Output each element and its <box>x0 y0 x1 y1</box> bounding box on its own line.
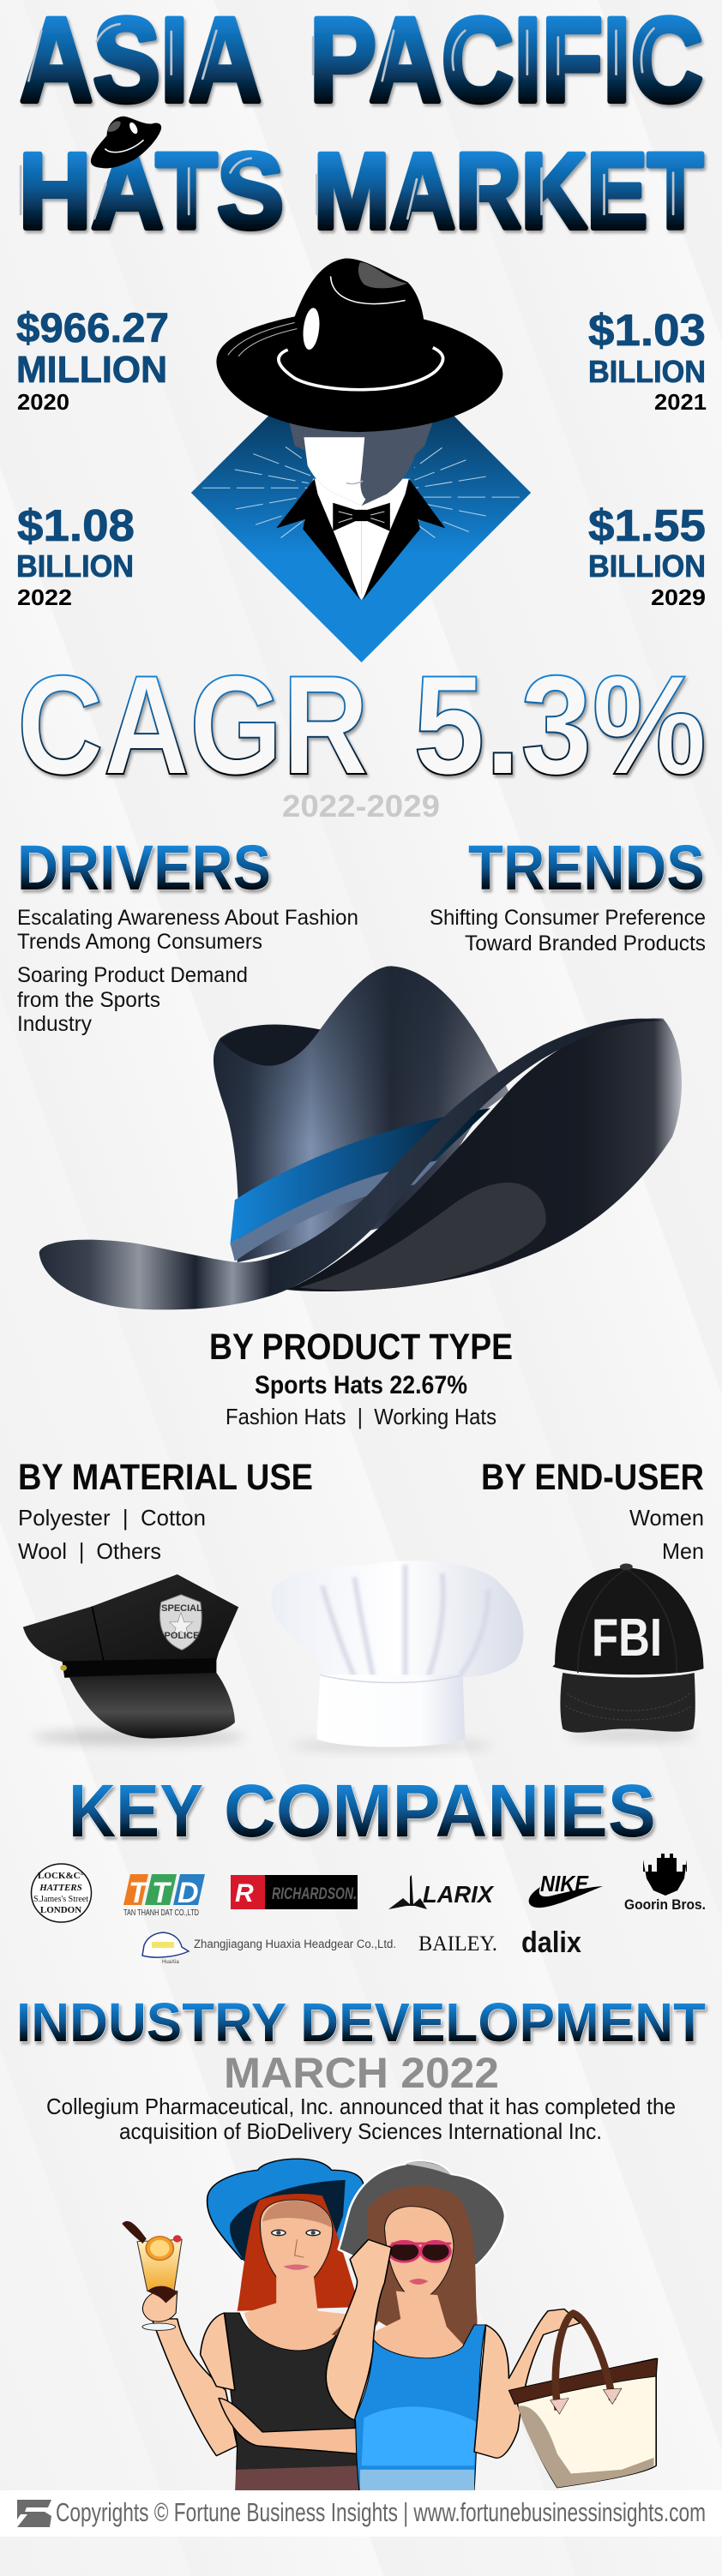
shirt <box>304 479 419 600</box>
bag arm <box>474 2309 581 2458</box>
title <box>19 0 703 251</box>
badge text <box>161 1603 202 1641</box>
logo: Huaxia <box>142 1932 396 1965</box>
rays <box>202 446 520 538</box>
logo: TTD <box>123 1874 205 1918</box>
product types: Fashion Hats | Working Hats <box>226 1404 496 1429</box>
logo: Goorin Bros <box>624 1854 706 1913</box>
icon: FBI cap <box>552 1564 704 1740</box>
stat: 2020 <box>16 306 169 415</box>
logo: Lock & Co: HATTERS <box>39 1883 82 1893</box>
cocktail <box>122 2221 182 2330</box>
logo: Bailey: BAILEY. <box>418 1932 497 1956</box>
heading: by material use: BY MATERIAL USE <box>18 1457 313 1498</box>
logo: Huaxia: Zhangjiagang Huaxia Headgear Co.,Ltd. <box>194 1938 396 1950</box>
development text: Collegium Pharmaceutical, Inc. announced that it has completed the <box>46 2094 676 2119</box>
stat: 2022 <box>16 501 135 610</box>
logo: Lock & Co: S.James's Street <box>33 1894 88 1904</box>
logo: Nike <box>529 1871 603 1908</box>
title line 2 <box>19 132 703 251</box>
stat: 2021 <box>588 306 707 415</box>
logo: Lock & Co <box>31 1864 91 1922</box>
material list <box>18 1505 206 1564</box>
end-user list: Women <box>629 1505 704 1531</box>
icon: small hat on title <box>91 117 161 168</box>
woman face <box>384 2207 454 2301</box>
crown <box>214 966 508 1262</box>
CAGR: CAGR <box>17 646 369 804</box>
stat: 2021: 2021 <box>654 389 707 415</box>
stat: 2020: 2020 <box>17 389 69 415</box>
material list: Polyester | Cotton <box>18 1505 206 1531</box>
black top <box>225 2313 359 2490</box>
sports hats share: Sports Hats 22.67% <box>255 1371 467 1399</box>
logo: Richardson <box>231 1875 358 1909</box>
drivers text: from the Sports <box>17 988 160 1012</box>
crossed forearm <box>219 2399 359 2453</box>
material list: Wool | Others <box>18 1538 161 1564</box>
logo: TTD: T <box>129 1877 149 1909</box>
stat: 2022: BILLION <box>16 548 134 584</box>
blue top <box>354 2325 486 2490</box>
grey hat <box>339 2160 505 2265</box>
logo: TTD: TAN THANH DAT CO.,LTD <box>123 1908 199 1918</box>
stat: 2022: 2022 <box>17 584 72 610</box>
drivers text: Trends Among Consumers <box>17 930 262 954</box>
footer band <box>0 2490 722 2537</box>
title line 1 <box>20 0 703 127</box>
red hair <box>238 2194 359 2311</box>
stat: 2029: BILLION <box>588 548 706 584</box>
badge text: SPECIAL <box>161 1603 202 1614</box>
date: MARCH 2022 <box>224 2049 499 2097</box>
development text <box>46 2094 676 2144</box>
footer logo <box>17 2500 51 2527</box>
stat: 2029: $1.55 <box>588 501 706 551</box>
logo: Lock & Co: LONDON <box>40 1905 81 1915</box>
icon: chef hat <box>271 1561 524 1751</box>
logo: TTD: T <box>152 1877 172 1909</box>
trends text: Toward Branded Products <box>465 932 706 956</box>
stat: 2021: $1.03 <box>588 306 706 356</box>
logo: Larix: LARIX <box>423 1881 495 1908</box>
diamond <box>191 324 531 662</box>
CAGR <box>17 646 707 804</box>
stat: 2029: 2029 <box>651 584 706 610</box>
trends text: Shifting Consumer Preference <box>430 906 706 930</box>
logo: Nike: NIKE <box>540 1871 589 1896</box>
bow tie <box>333 503 390 531</box>
face <box>288 416 435 506</box>
sunglasses <box>388 2241 451 2261</box>
title letter highlights <box>21 24 673 219</box>
drivers text: Soaring Product Demand <box>17 963 248 987</box>
lower strip <box>230 1160 437 1261</box>
trends text <box>430 906 706 956</box>
logo: Dalix: dalix <box>521 1926 581 1959</box>
illustration: man in hat on blue diamond <box>191 259 531 662</box>
drivers text: Escalating Awareness About Fashion <box>17 906 358 930</box>
badge text: POLICE <box>165 1631 199 1641</box>
logo: Goorin Bros: Goorin Bros. <box>624 1897 706 1913</box>
logo: Lock & Co: LOCK&C° <box>38 1871 84 1881</box>
heading: key companies: KEY <box>69 1770 203 1853</box>
heading: key companies: COMPANIES <box>224 1770 656 1853</box>
band <box>230 1108 490 1243</box>
logo: Huaxia: HuaXia <box>162 1960 179 1965</box>
chest <box>369 2291 465 2357</box>
raised arm <box>152 2319 238 2456</box>
front brim <box>39 1019 663 1309</box>
blue hat <box>208 2159 364 2260</box>
logo: Richardson: R <box>235 1879 254 1908</box>
end-user list <box>629 1505 704 1564</box>
rear brim <box>286 1018 682 1291</box>
logo: TTD: D <box>177 1877 199 1909</box>
stat: 2020: $966.27 <box>16 306 169 351</box>
drivers text: Industry <box>17 1012 92 1036</box>
FBI text: FBI <box>592 1609 662 1668</box>
heading: trends: TRENDS <box>468 832 705 903</box>
logo: Richardson: RICHARDSON. <box>272 1885 357 1903</box>
illustration: two women in hats <box>122 2159 658 2490</box>
heading: drivers: DRIVERS <box>17 832 271 903</box>
title line 2: HATS <box>19 132 284 251</box>
development text: acquisition of BioDelivery Sciences International Inc. <box>119 2118 602 2144</box>
stat: 2021: BILLION <box>588 354 706 389</box>
heading: by product type: BY PRODUCT TYPE <box>209 1327 513 1368</box>
handbag <box>508 2313 658 2488</box>
stat: 2020: MILLION <box>16 349 167 391</box>
drivers text <box>17 906 358 1036</box>
stat: 2022: $1.08 <box>17 501 135 551</box>
logo: Larix <box>388 1875 495 1909</box>
end-user list: Men <box>662 1538 704 1564</box>
arm to glasses <box>326 2239 391 2420</box>
fedora <box>216 259 502 432</box>
red-haired neck <box>244 2271 354 2351</box>
brown hair <box>367 2186 477 2363</box>
jacket <box>276 479 360 600</box>
stat: 2029 <box>588 501 706 610</box>
CAGR period: 2022-2029 <box>282 788 440 824</box>
icon: police cap <box>23 1574 244 1744</box>
red-haired face <box>260 2200 333 2289</box>
heading: industry development: INDUSTRY DEVELOPMENT <box>16 1992 706 2053</box>
illustration: cowboy hat <box>39 966 682 1309</box>
